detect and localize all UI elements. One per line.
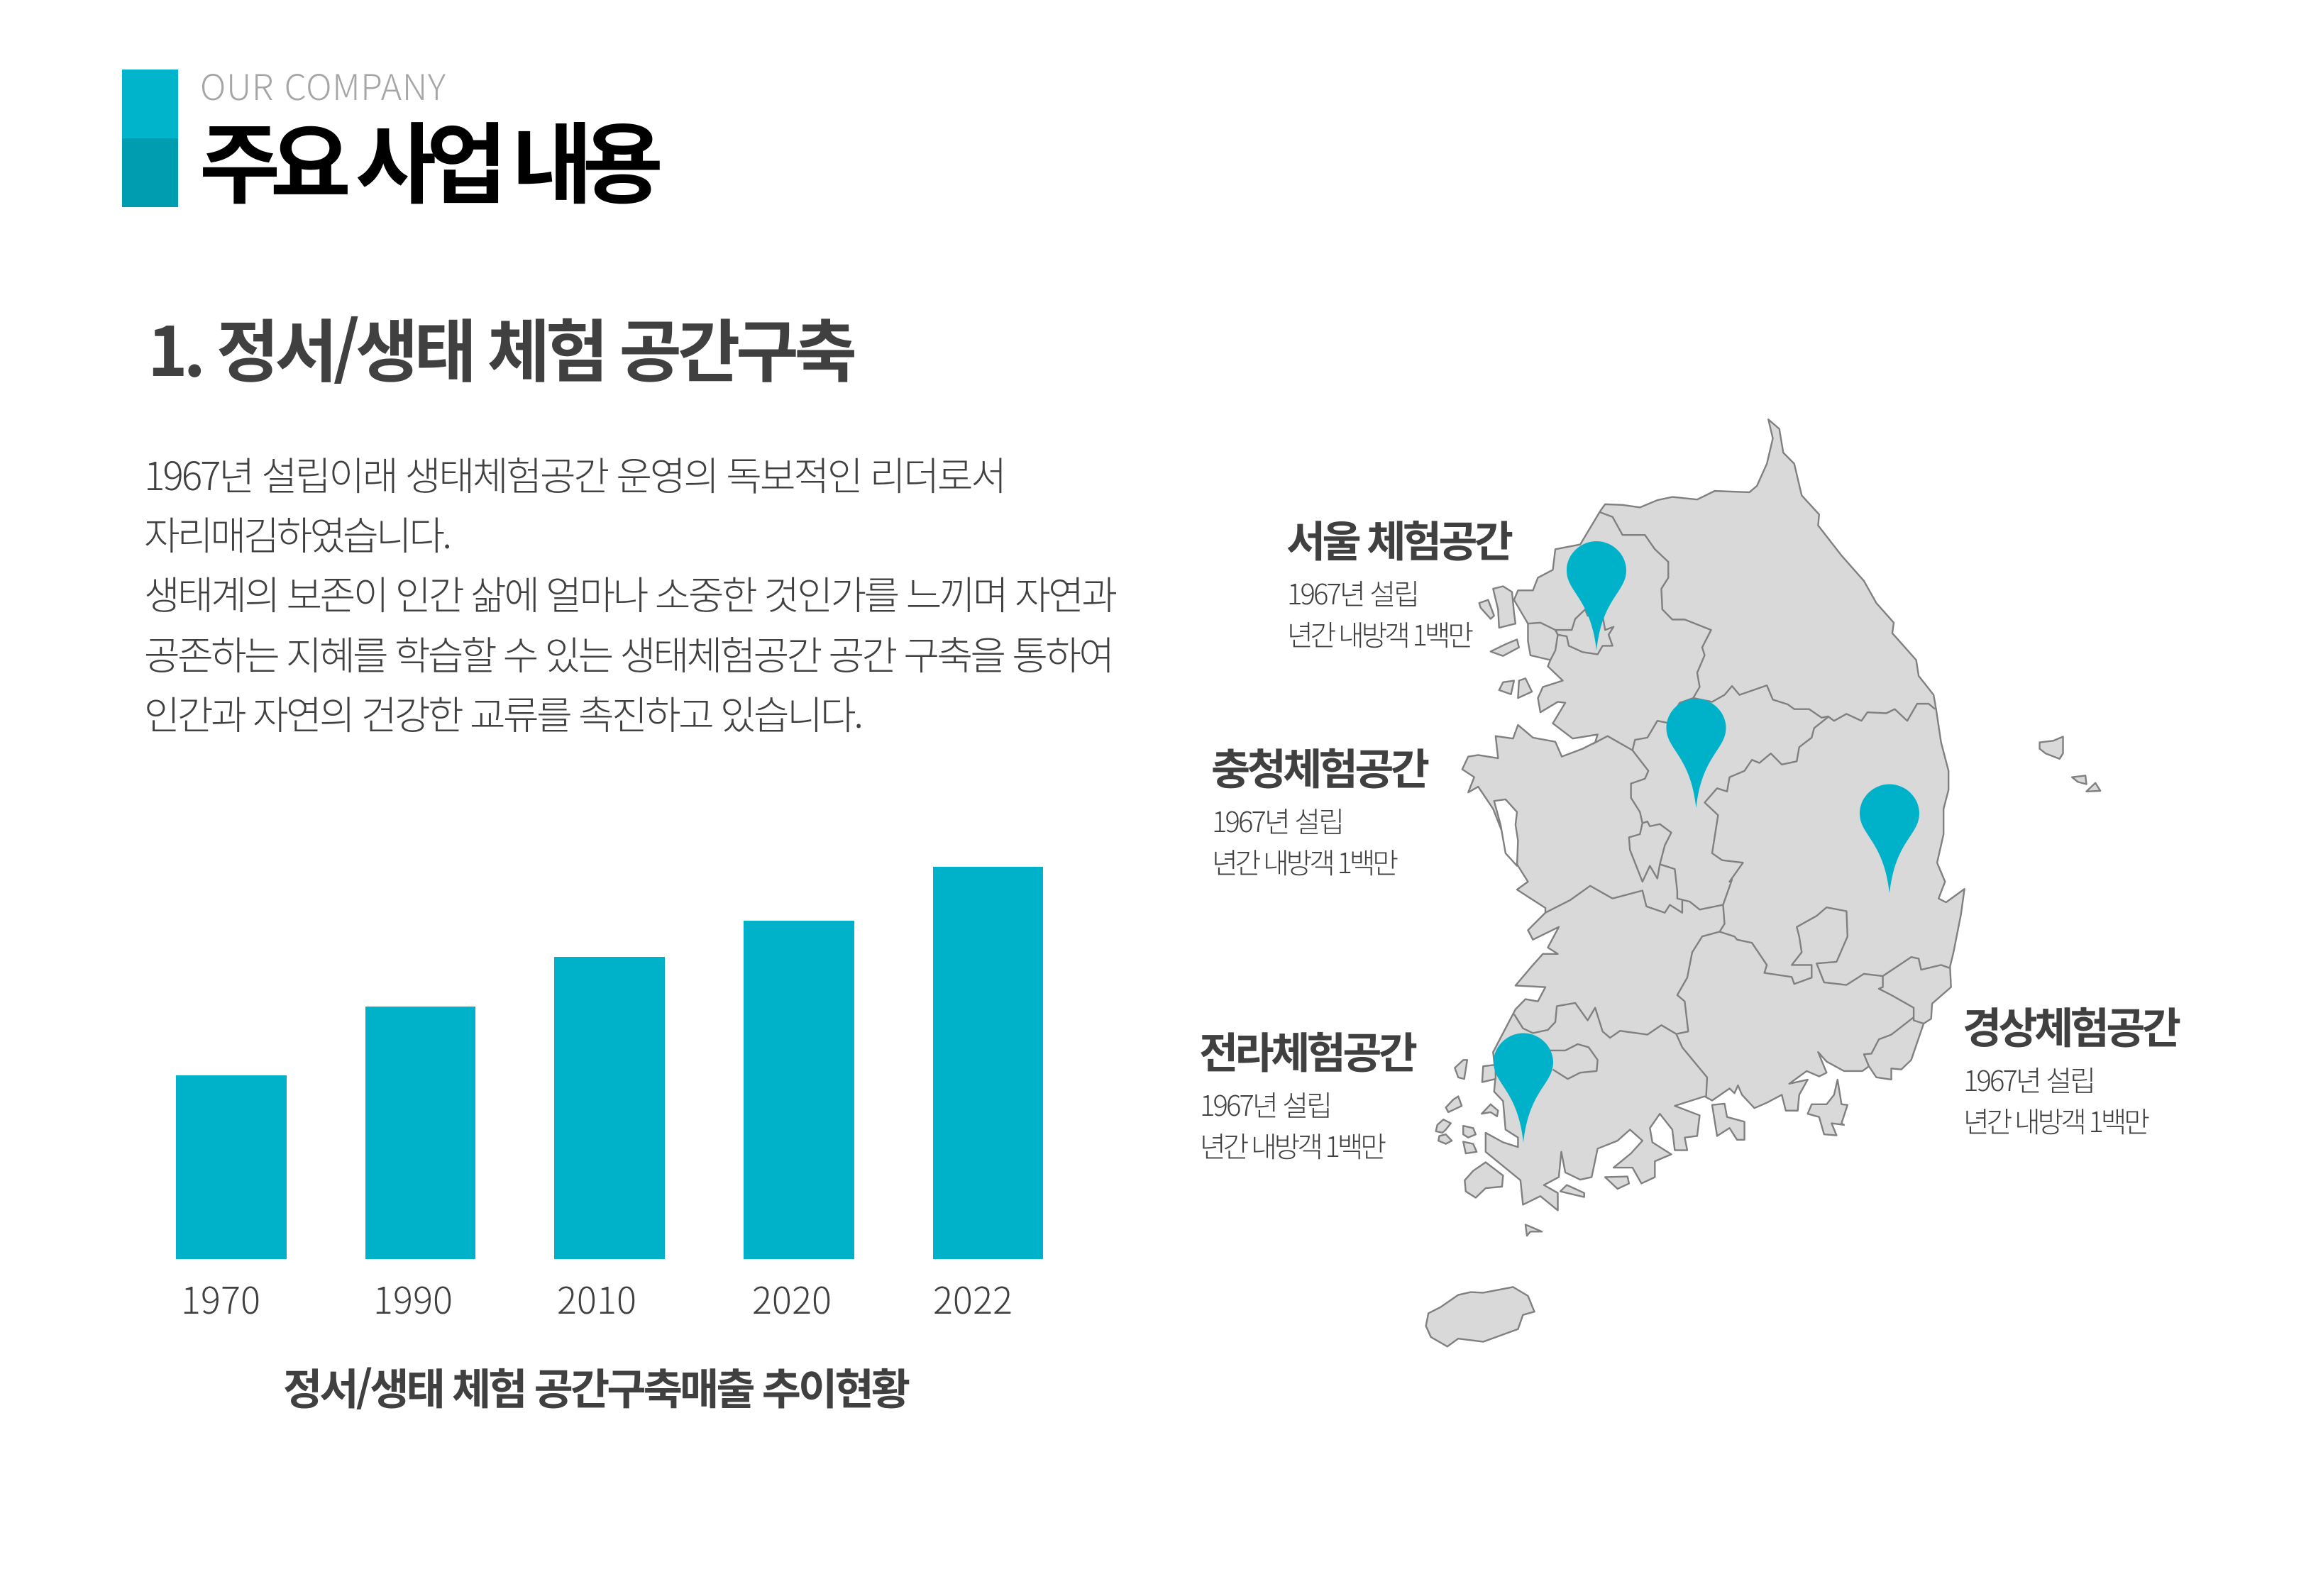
provincial borders — [1514, 512, 1950, 1097]
body text: 1967년 설립이래 생태체험공간 운영의 독보적인 리더로서 — [144, 445, 1007, 501]
body text — [144, 445, 1118, 741]
callout: Chungcheong: 충청체험공간 — [1211, 736, 1430, 797]
callout: Gyeongsang: 경상체험공간 — [1963, 994, 2181, 1056]
map of South Korea — [1426, 419, 2100, 1346]
year labels: 1990 — [373, 1271, 453, 1324]
callout: Gyeongsang — [1963, 994, 2181, 1141]
bars — [176, 867, 1043, 1259]
callout: Gyeongsang: 년간 내방객 1백만 — [1963, 1099, 2150, 1141]
callout: Chungcheong — [1211, 736, 1430, 882]
callout: Seoul: 1967년 설립 — [1287, 572, 1420, 613]
callout: Jeolla: 년간 내방객 1백만 — [1200, 1124, 1386, 1165]
callout: Seoul — [1286, 508, 1513, 654]
map pin: Chungcheong — [1666, 699, 1726, 808]
body text: 공존하는 지혜를 학습할 수 있는 생태체험공간 공간 구축을 통하여 — [144, 624, 1115, 681]
map pin: Jeolla — [1494, 1033, 1553, 1142]
year labels — [181, 1271, 1013, 1324]
year labels: 1970 — [181, 1271, 260, 1324]
mainland — [1462, 419, 1965, 1210]
Cheonsu bay — [1494, 799, 1518, 866]
chart caption: 정서/생태 체험 공간구축매출 추이현황 — [283, 1356, 910, 1417]
eyebrow: OUR COMPANY: OUR COMPANY — [200, 60, 446, 111]
map pin: Gyeongsang — [1860, 785, 1919, 894]
callout: Jeolla — [1199, 1019, 1418, 1165]
map pin: Seoul — [1567, 541, 1626, 650]
header accent block — [122, 70, 178, 207]
title: 주요 사업 내용 — [199, 94, 663, 221]
callout: Seoul: 서울 체험공간 — [1286, 508, 1513, 570]
bar chart — [176, 867, 1043, 1324]
callout: Jeolla: 전라체험공간 — [1199, 1019, 1418, 1081]
year labels: 2020 — [752, 1271, 832, 1324]
islands — [1426, 587, 2100, 1346]
year labels: 2022 — [933, 1271, 1013, 1324]
callout: Jeolla: 1967년 설립 — [1200, 1083, 1333, 1124]
body text: 인간과 자연의 건강한 교류를 촉진하고 있습니다. — [144, 684, 864, 741]
callout: Chungcheong: 1967년 설립 — [1212, 799, 1345, 841]
body text: 생태계의 보존이 인간 삶에 얼마나 소중한 것인가를 느끼며 자연과 — [144, 564, 1118, 621]
year labels: 2010 — [557, 1271, 636, 1324]
body text: 자리매김하였습니다. — [144, 504, 452, 561]
callout: Seoul: 년간 내방객 1백만 — [1287, 613, 1474, 654]
callout: Chungcheong: 년간 내방객 1백만 — [1212, 841, 1399, 882]
callout: Gyeongsang: 1967년 설립 — [1963, 1058, 2096, 1099]
section heading: 1. 정서/생태 체험 공간구축 — [148, 297, 857, 396]
